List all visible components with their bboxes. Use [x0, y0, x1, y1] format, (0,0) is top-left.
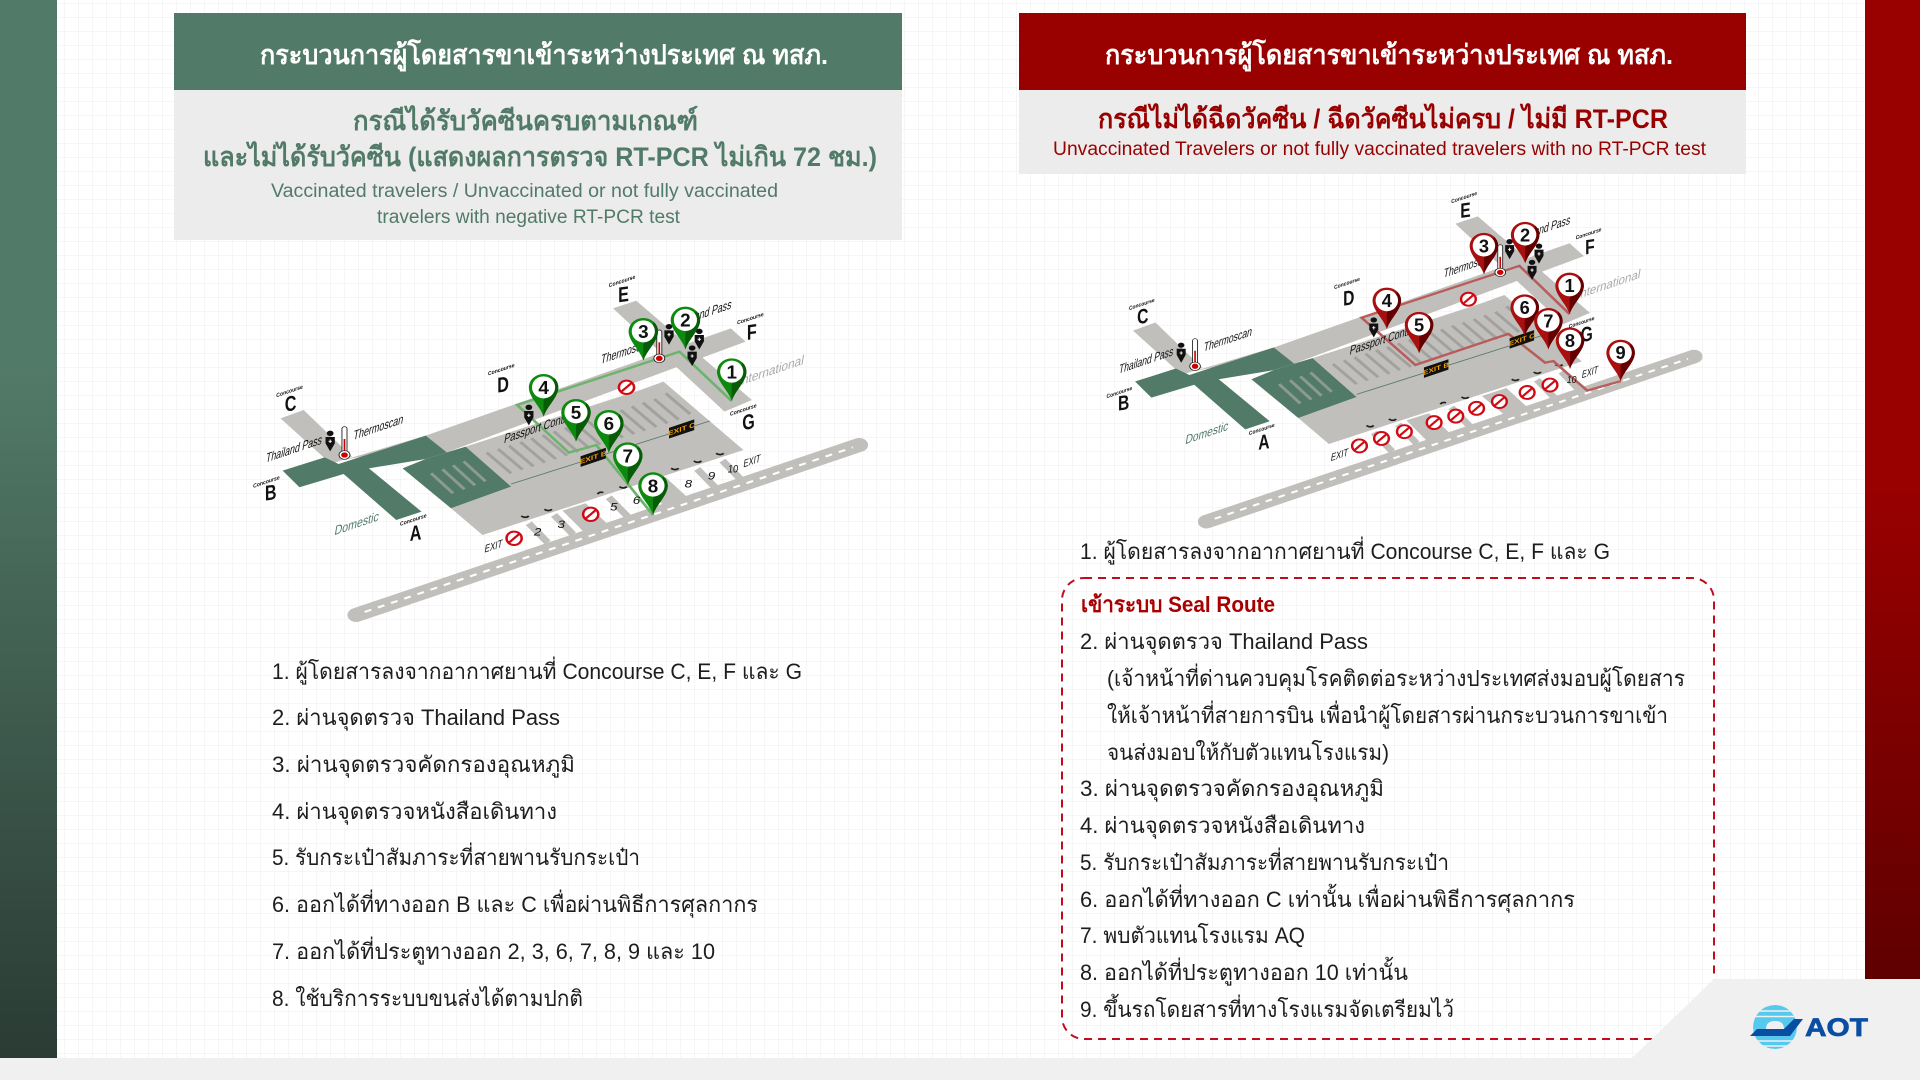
left process steps list: 5. รับกระเป๋าสัมภาระที่สายพานรับกระเป๋า — [272, 842, 640, 870]
pin 6 — [1510, 294, 1539, 336]
panel: unvaccinated travelers header — [1019, 13, 1746, 174]
pin 4: 4 — [538, 377, 549, 398]
seal route steps: 6. ออกได้ที่ทางออก C เท่านั้น เพื่อผ่านพิธีการศุลกากร — [1080, 884, 1575, 913]
map labels — [253, 274, 805, 555]
map labels: 6 — [633, 494, 641, 507]
map labels: Concourse — [1249, 422, 1275, 437]
map labels: Concourse — [1576, 227, 1602, 241]
pin 7: 7 — [623, 445, 633, 466]
pin 6: 6 — [604, 413, 614, 434]
map labels: Domestic — [1184, 419, 1230, 448]
airport map: red seal route — [1107, 190, 1694, 522]
map labels: Thermoscan — [1203, 325, 1253, 355]
map labels: C — [285, 392, 297, 417]
left process steps list: 6. ออกได้ที่ทางออก B และ C เพื่อผ่านพิธีการศุลกากร — [272, 889, 758, 918]
pin 9 — [1606, 340, 1635, 381]
pin 3: 3 — [638, 321, 649, 342]
map labels: International — [1576, 267, 1642, 303]
no entry signs — [507, 381, 634, 545]
pin 1: 1 — [1565, 276, 1575, 296]
pin 9: 9 — [1616, 343, 1626, 363]
map labels: F — [1585, 234, 1595, 259]
pin 3: 3 — [1479, 236, 1489, 256]
exit badges: EXIT B — [1423, 360, 1450, 377]
map labels: F — [747, 321, 757, 346]
left title: กระบวนการผู้โดยสารขาเข้าระหว่างประเทศ ณ ทสภ. — [260, 38, 828, 72]
right red side bar — [1865, 0, 1920, 979]
seal route steps: 7. พบตัวแทนโรงแรม AQ — [1080, 923, 1305, 948]
map labels: Passport Control — [503, 409, 575, 447]
pin 4 — [529, 374, 558, 417]
map labels: EXIT — [1331, 446, 1349, 464]
map labels: 10 — [728, 463, 738, 475]
exit badges: EXIT C — [1509, 331, 1536, 348]
map labels: Thailand Pass — [1515, 213, 1571, 246]
pin 3 — [629, 318, 658, 361]
panel: vaccinated travelers header — [174, 13, 902, 240]
map labels: 2 — [533, 526, 542, 538]
pin 2: 2 — [1520, 225, 1530, 245]
left process steps list: 3. ผ่านจุดตรวจคัดกรองอุณหภูมิ — [272, 752, 575, 778]
left subtitle line 2: และไม่ได้รับวัคซีน (แสดงผลการตรวจ RT-PCR ไม่เกิน 72 ชม.) — [203, 141, 877, 172]
airport map: green route — [253, 274, 859, 615]
seal route steps: 8. ออกได้ที่ประตูทางออก 10 เท่านั้น — [1080, 957, 1408, 986]
left english line 1: Vaccinated travelers / Unvaccinated or not fully vaccinated — [271, 181, 778, 202]
map labels: Concourse — [609, 274, 636, 289]
seal route heading: เข้าระบบ Seal Route — [1081, 592, 1275, 617]
map labels: Concourse — [488, 362, 515, 377]
map labels: Concourse — [276, 384, 303, 399]
map labels: Concourse — [1569, 315, 1595, 330]
left process steps list: 2. ผ่านจุดตรวจ Thailand Pass — [272, 705, 560, 731]
map labels: D — [1343, 285, 1354, 310]
pin 3 — [1470, 233, 1498, 274]
seal route line — [1362, 266, 1621, 391]
map labels: Thermoscan — [1443, 251, 1493, 281]
map labels — [1107, 190, 1642, 464]
left english line 2: travelers with negative RT-PCR test — [377, 207, 681, 228]
map labels: Concourse — [1107, 385, 1133, 400]
pin 5 — [561, 399, 591, 442]
exit badges: EXIT B — [580, 449, 607, 466]
map labels: Thermoscan — [352, 412, 404, 443]
right english subtitle: Unvaccinated Travelers or not fully vaccinated travelers with no RT-PCR test — [1053, 139, 1707, 160]
seal route steps: จนส่งมอบให้กับตัวแทนโรงแรม) — [1107, 740, 1389, 765]
map labels: Thermoscan — [600, 336, 652, 367]
pin 7: 7 — [1543, 311, 1553, 331]
pin 7 — [613, 442, 642, 485]
map labels: EXIT — [743, 452, 761, 470]
right step 1: 1. ผู้โดยสารลงจากอากาศยานที่ Concourse C, E, F และ G — [1080, 536, 1610, 565]
map labels: A — [410, 521, 422, 547]
map labels: Thailand Pass — [1118, 345, 1174, 377]
map labels: Concourse — [253, 475, 280, 490]
map labels: 8 — [685, 478, 692, 490]
panel: seal route dashed box — [1062, 578, 1714, 1039]
left process steps list: 8. ใช้บริการระบบขนส่งได้ตามปกติ — [272, 986, 583, 1011]
pin 1 — [717, 358, 746, 401]
seal route steps: (เจ้าหน้าที่ด่านควบคุมโรคติดต่อระหว่างประเทศส่งมอบผู้โดยสาร — [1107, 663, 1685, 692]
map labels: C — [1137, 303, 1148, 329]
seal route steps — [1080, 629, 1685, 1022]
pin 6 — [594, 410, 624, 453]
map labels: Concourse — [1129, 297, 1155, 312]
map labels: 5 — [610, 501, 618, 513]
exit badges — [580, 419, 696, 467]
map labels: B — [265, 481, 277, 506]
map labels: E — [618, 283, 629, 308]
pin 2 — [671, 307, 700, 349]
map labels: D — [497, 373, 509, 398]
checkpoint icons — [1177, 239, 1543, 370]
pin 5: 5 — [571, 402, 581, 423]
logo: AOT: AOT — [1805, 1014, 1868, 1042]
checkpoint icons — [326, 324, 704, 459]
seal route steps: ให้เจ้าหน้าที่สายการบิน เพื่อนำผู้โดยสารผ่านกระบวนการขาเข้า — [1107, 700, 1668, 729]
right subtitle: กรณีไม่ได้ฉีดวัคซีน / ฉีดวัคซีนไม่ครบ / ไม่มี RT-PCR — [1098, 103, 1668, 134]
left subtitle line 1: กรณีได้รับวัคซีนครบตามเกณฑ์ — [353, 105, 698, 136]
exit badges — [1423, 330, 1536, 378]
left process steps list: 1. ผู้โดยสารลงจากอากาศยานที่ Concourse C, E, F และ G — [272, 656, 802, 685]
pin 1: 1 — [726, 361, 737, 382]
pin 1 — [1555, 273, 1584, 314]
map labels: International — [737, 353, 805, 389]
map labels: G — [742, 410, 755, 436]
map labels: 3 — [557, 518, 565, 531]
pin 5 — [1405, 312, 1433, 353]
pin 5: 5 — [1414, 315, 1424, 335]
right title: กระบวนการผู้โดยสารขาเข้าระหว่างประเทศ ณ ทสภ. — [1105, 38, 1673, 72]
pin 8: 8 — [648, 475, 658, 496]
pin 2: 2 — [680, 310, 691, 331]
left process steps list: 7. ออกได้ที่ประตูทางออก 2, 3, 6, 7, 8, 9 และ 10 — [272, 936, 715, 965]
route line — [517, 352, 732, 515]
pin 2 — [1511, 222, 1539, 263]
seal route steps: 4. ผ่านจุดตรวจหนังสือเดินทาง — [1080, 813, 1365, 839]
map labels: Concourse — [1334, 276, 1360, 291]
pin 4: 4 — [1382, 291, 1393, 311]
map labels: Domestic — [333, 509, 380, 539]
map labels: B — [1118, 390, 1129, 415]
map labels: Concourse — [730, 403, 757, 418]
map labels: Concourse — [737, 311, 764, 326]
no entry signs on exits — [1352, 293, 1557, 452]
map labels: 9 — [708, 470, 715, 482]
pin 7 — [1534, 308, 1563, 349]
pin 8 — [638, 472, 668, 515]
map labels: Thailand Pass — [674, 297, 733, 331]
seal route steps: 5. รับกระเป๋าสัมภาระที่สายพานรับกระเป๋า — [1080, 847, 1449, 875]
map labels: EXIT — [1582, 363, 1599, 381]
pin 8 — [1556, 327, 1584, 369]
map labels: Thailand Pass — [265, 432, 323, 466]
map labels: A — [1258, 429, 1270, 454]
seal route steps: 3. ผ่านจุดตรวจคัดกรองอุณหภูมิ — [1080, 776, 1384, 802]
map labels: EXIT — [485, 537, 503, 555]
map labels: G — [1581, 321, 1593, 346]
exit badges: EXIT C — [668, 421, 696, 438]
pin 6: 6 — [1520, 298, 1530, 318]
map labels: Concourse — [400, 513, 427, 528]
map labels: Concourse — [1451, 190, 1477, 205]
pin 8: 8 — [1565, 331, 1575, 351]
seal route steps: 9. ขึ้นรถโดยสารที่ทางโรงแรมจัดเตรียมไว้ — [1080, 994, 1454, 1022]
left green side bar — [0, 0, 57, 1058]
pin 4 — [1373, 288, 1401, 329]
left process steps list — [272, 656, 802, 1011]
seal route steps: 2. ผ่านจุดตรวจ Thailand Pass — [1080, 629, 1368, 655]
left process steps list: 4. ผ่านจุดตรวจหนังสือเดินทาง — [272, 799, 557, 825]
footer band with diagonal corner — [0, 979, 1920, 1080]
map labels: E — [1460, 197, 1471, 222]
map labels: Passport Control — [1349, 322, 1418, 358]
map labels: 10 — [1567, 374, 1577, 386]
logo: AOT — [1750, 1005, 1868, 1049]
